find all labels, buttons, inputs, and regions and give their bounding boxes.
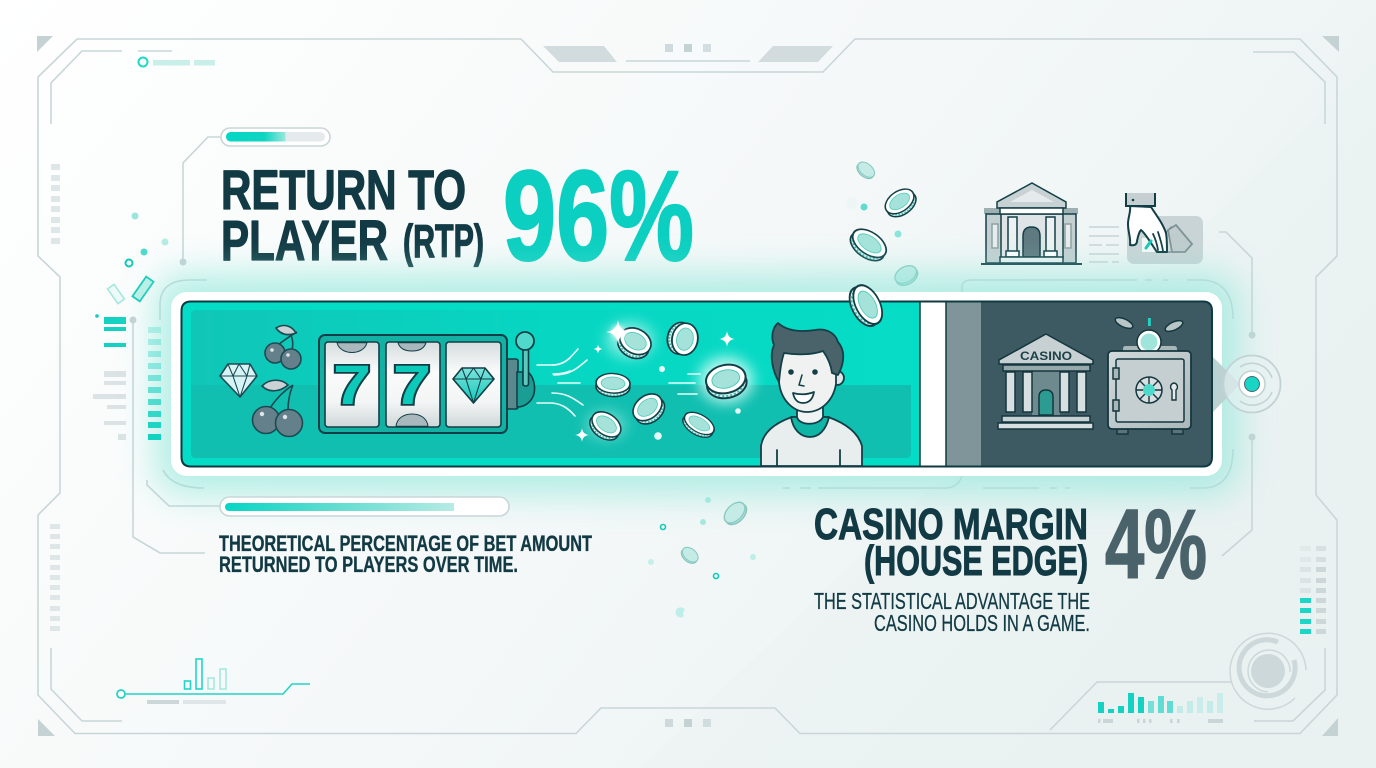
mini chart bottom left (117, 659, 310, 704)
stat: 96 percent: 96% (503, 145, 694, 288)
icon: target pointer (1213, 356, 1280, 412)
heading: return to player (221, 158, 484, 273)
scattered lower coins (648, 497, 756, 617)
description: house edge: THE STATISTICAL ADVANTAGE THE (814, 588, 1090, 614)
bar chart bottom right (1098, 693, 1223, 723)
heading: return to player: (RTP) (403, 215, 484, 267)
description: house edge (814, 588, 1090, 636)
coin crossing bar top (844, 280, 888, 331)
icon: bank building (981, 183, 1082, 264)
radial dial bottom right (1230, 633, 1306, 709)
icon: upper cherries (265, 326, 301, 369)
description: RTP: THEORETICAL PERCENTAGE OF BET AMOUNT (219, 531, 592, 556)
reel symbol: diamond (453, 368, 494, 403)
icon: small diamond (220, 364, 257, 397)
top-left status marker (138, 58, 215, 66)
segment: grey divider (946, 302, 981, 466)
icon: casino building (998, 334, 1093, 429)
heading: casino margin (814, 500, 1088, 584)
main bar glow (156, 274, 1238, 494)
segment: RTP teal (182, 302, 920, 466)
teal gradient tick column (148, 327, 161, 440)
heading: casino margin: (HOUSE EDGE) (864, 537, 1088, 584)
sparkles (575, 320, 741, 442)
stat: 4 percent: 4% (1105, 489, 1207, 599)
icon: hand taking cards (1126, 193, 1203, 264)
floating coins above bar (845, 159, 921, 289)
motion lines (537, 349, 700, 416)
reel symbol: seven: 7 (393, 353, 431, 416)
description: RTP: RETURNED TO PLAYERS OVER TIME. (219, 552, 518, 577)
coin glows (586, 322, 753, 439)
left data ticks (93, 212, 168, 440)
decorative note lines (1089, 227, 1119, 262)
icon: safe with coin (1108, 315, 1191, 434)
heading: return to player: RETURN TO (221, 158, 466, 221)
segment: gap (921, 302, 946, 466)
icon: slot machine (319, 332, 535, 433)
right tick columns (1300, 546, 1326, 634)
segment: house dark (981, 302, 1212, 466)
heading: casino margin: CASINO MARGIN (814, 500, 1088, 549)
lower progress pill (220, 497, 509, 516)
icon: smiling player (761, 323, 862, 466)
top progress pill (221, 128, 330, 146)
description: house edge: CASINO HOLDS IN A GAME. (874, 610, 1090, 636)
heading: return to player: PLAYER (221, 209, 388, 273)
icon: lower cherries (252, 380, 302, 436)
reel symbol: seven: 7 (333, 353, 371, 416)
inner teal panel (191, 310, 911, 458)
description: RTP (219, 531, 592, 577)
casino sign: CASINO (1020, 351, 1072, 363)
coins stream (585, 320, 749, 445)
panel: split bar (171, 292, 1222, 476)
